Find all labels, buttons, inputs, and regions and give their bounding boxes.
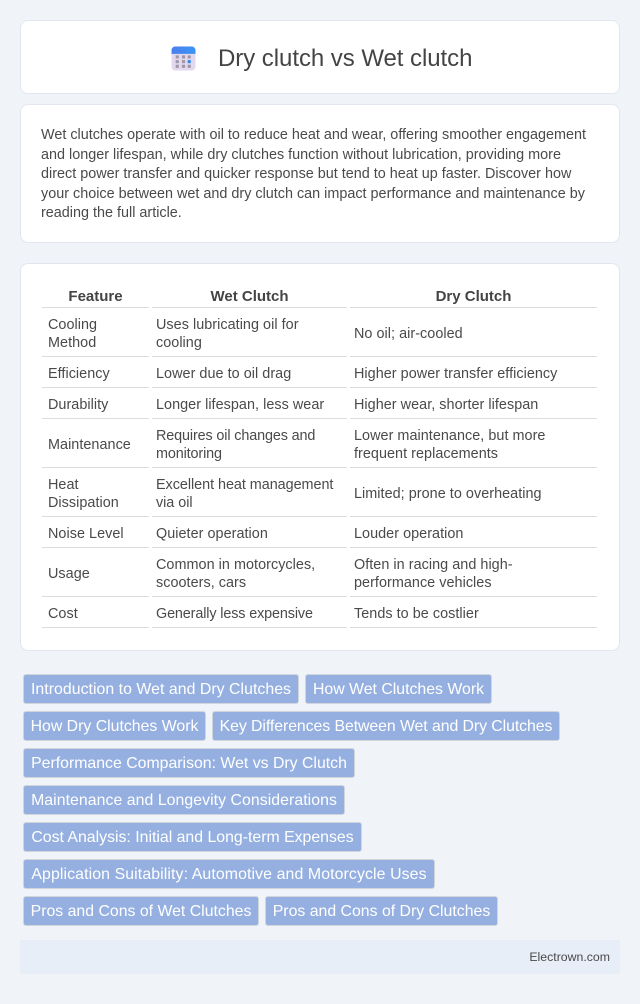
footer bar [20,940,620,974]
row: maintenance: Lower maintenance, but more [354,428,545,444]
row: heat dissipation: Excellent heat management [156,477,333,493]
row: usage: Usage [48,566,90,582]
row: heat dissipation: via oil [156,495,193,511]
summary paragraph [41,127,586,221]
row: maintenance: Requires oil changes and [156,428,315,444]
title: Dry clutch vs Wet clutch [218,45,472,72]
row: usage: performance vehicles [354,575,492,591]
row: usage: Common in motorcycles, [156,557,315,573]
tag: how wet clutches work [305,674,492,704]
row: durability: Higher wear, shorter lifespan [354,397,538,413]
topic tags [23,674,560,926]
summary paragraph: reading the full article. [41,205,182,221]
row: maintenance: frequent replacements [354,446,498,462]
tag: pros and cons dry: Pros and Cons of Dry Clutches [273,903,490,920]
tag: how dry clutches work [23,711,206,741]
row: cooling method [42,317,597,357]
row: cooling method: Cooling [48,317,97,333]
row: noise level: Noise Level [48,526,124,542]
row: heat dissipation: Dissipation [48,495,119,511]
row: usage: Often in racing and high- [354,557,513,573]
tag: introduction: Introduction to Wet and Dry Clutches [31,681,291,698]
table header [42,288,597,308]
panel: title card [20,20,620,94]
row: durability: Longer lifespan, less wear [156,397,324,413]
icon: calendar [172,46,196,70]
summary paragraph: direct power transfer and quicker response but tend to heat up faster. Discover how [41,166,571,182]
tag: how dry clutches work: How Dry Clutches Work [31,718,198,735]
tag: pros and cons wet: Pros and Cons of Wet Clutches [31,903,251,920]
row: efficiency: Lower due to oil drag [156,366,291,382]
footer credit: Electrown.com [529,950,610,964]
row: durability [42,397,597,419]
tag: performance comparison: Performance Comparison: Wet vs Dry Clutch [31,755,347,772]
tag: introduction [23,674,299,704]
comparison table [42,288,597,628]
row: cost: Generally less expensive [156,606,313,622]
row: usage [42,557,597,597]
tag: maintenance and longevity: Maintenance and Longevity Considerations [31,792,337,809]
table header: Dry Clutch [436,288,511,305]
tag: pros and cons wet [23,896,259,926]
table header: Wet Clutch [210,288,289,305]
row: noise level: Quieter operation [156,526,268,542]
row: efficiency [42,366,597,388]
row: heat dissipation: Heat [48,477,79,493]
row: efficiency: Higher power transfer efficiency [354,366,557,382]
row: efficiency: Efficiency [48,366,110,382]
panel: summary text [20,104,620,243]
row: cooling method: No oil; air-cooled [354,326,463,342]
row: cost: Tends to be costlier [354,606,479,622]
tag: application suitability: Application Suitability: Automotive and Motorcycle Uses [31,866,427,883]
row: cooling method: cooling [156,335,202,351]
row: cost: Cost [48,606,78,622]
summary paragraph: and longer lifespan, while dry clutches function without lubrication, providing more [41,146,561,162]
row: maintenance [42,428,597,468]
row: durability: Durability [48,397,108,413]
row: cooling method: Uses lubricating oil for [156,317,299,333]
tag: maintenance and longevity [23,785,345,815]
row: maintenance: monitoring [156,446,222,462]
row: heat dissipation [42,477,597,517]
row: noise level [42,526,597,548]
row: maintenance: Maintenance [48,437,131,453]
tag: key differences [212,711,560,741]
summary paragraph: Wet clutches operate with oil to reduce heat and wear, offering smoother engagement [41,127,586,143]
row: usage: scooters, cars [156,575,246,591]
row: noise level: Louder operation [354,526,463,542]
table header: Feature [68,288,123,305]
tag: pros and cons dry [265,896,498,926]
tag: performance comparison [23,748,355,778]
summary paragraph: your choice between wet and dry clutch can impact performance and maintenance by [41,186,585,202]
row: cost [42,606,597,628]
tag: cost analysis [23,822,362,852]
panel: comparison table card [20,263,620,651]
tag: how wet clutches work: How Wet Clutches Work [313,681,484,698]
tag: application suitability [23,859,435,889]
row: cooling method: Method [48,335,96,351]
tag: key differences: Key Differences Between Wet and Dry Clutches [220,718,552,735]
tag: cost analysis: Cost Analysis: Initial and Long-term Expenses [31,829,354,846]
row: heat dissipation: Limited; prone to overheating [354,486,542,502]
